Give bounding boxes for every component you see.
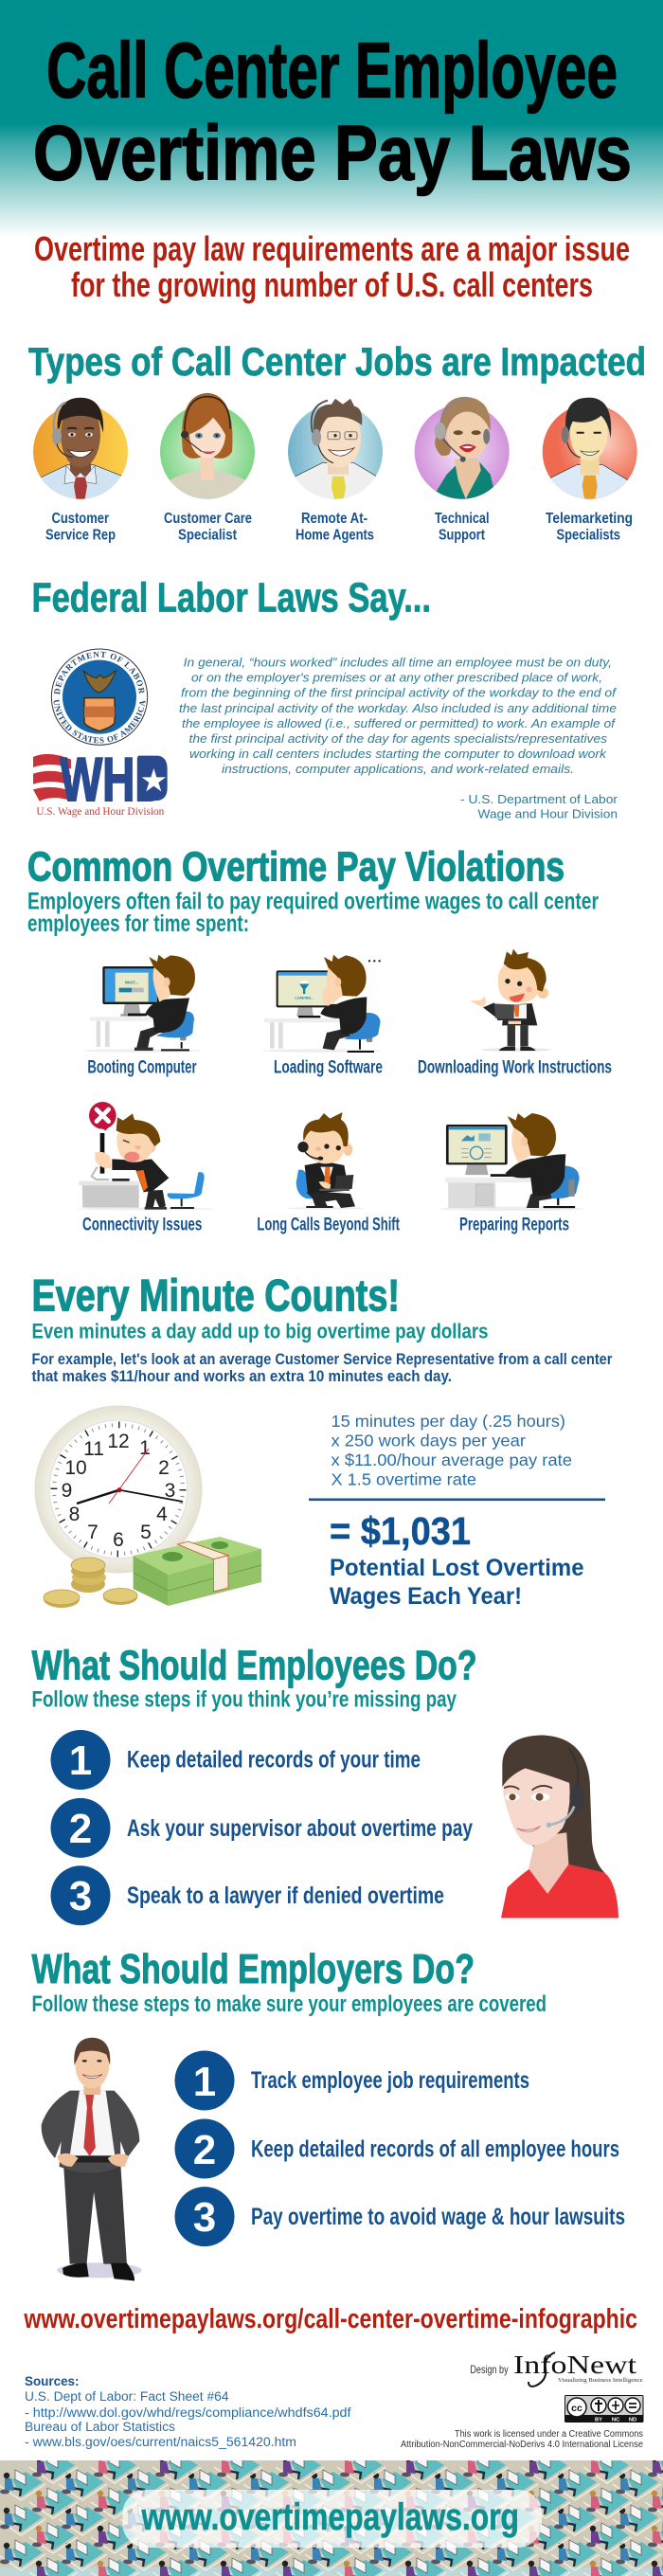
icon: businessman [42,2038,142,2280]
step 3 badge: 3 [193,2194,216,2241]
icon: wall clock: 8 [69,1504,80,1525]
panel: job types [33,393,637,544]
job labels: Home Agents [296,527,374,544]
step 1 badge: 1 [193,2059,216,2105]
icon: department of labor seal: DEPARTMENT OF LABOR [54,652,144,695]
icon: wall clock: 2 [158,1457,170,1479]
job labels: Customer [51,511,109,527]
calculation steps: x 250 work days per year [332,1432,526,1450]
example text: that makes $11/hour and works an extra 10 minutes each day. [32,1368,452,1385]
text block: hours worked quote: the last principal activity of the workday. Also included is any additional time [179,701,617,715]
job labels: Remote At- [301,511,367,527]
step 2 badge [174,2118,235,2179]
calculation steps [332,1412,572,1489]
sources: - http://www.dol.gov/whd/regs/compliance/whdfs64.pdf [25,2405,351,2421]
sources: Sources: [25,2374,80,2389]
heading: every minute counts: Every Minute Counts! [32,1270,400,1320]
calculation result: = $1,031 [330,1509,471,1553]
job labels: Specialist [178,527,238,544]
employees subheading: Follow these steps if you think you’re missing pay [32,1687,457,1713]
violation labels: Connectivity Issues [82,1216,202,1235]
text block: hours worked quote: from the beginning of the first principal activity of the workday to the end of [181,686,617,700]
designer credit logo: Visualizing Business Intelligence [558,2377,643,2384]
violation labels: Preparing Reports [459,1216,569,1235]
calculation steps: 15 minutes per day (.25 hours) [332,1412,565,1431]
job labels [45,511,633,544]
calculation steps: x $11.00/hour average pay rate [332,1450,572,1469]
icon: wage and hour division logo: WHD [60,745,168,814]
designer credit logo: InfoNewt [513,2351,637,2379]
step texts: Keep detailed records of your time [127,1747,421,1774]
step 1 badge [51,1730,110,1790]
creative commons badge: ND [629,2418,636,2423]
example text [32,1351,613,1385]
job labels: Technical [435,511,489,527]
header gradient band [0,0,663,237]
icon: wall clock: 9 [62,1480,72,1502]
creative commons badge [564,2395,644,2423]
violation labels [82,1058,612,1235]
icon: wall clock [35,1406,202,1573]
text block: hours worked quote: or on the employer's premises or at any other prescribed place of work, [191,671,602,685]
sources: - www.bls.gov/oes/current/naics5_561420.htm [25,2435,296,2450]
icon: department of labor seal: UNITED STATES OF AMERICA [53,699,146,743]
heading: employers: What Should Employers Do? [32,1946,475,1992]
icon: wall clock: 7 [87,1522,99,1543]
step 2 badge: 2 [193,2127,216,2173]
step 3 badge: 3 [69,1873,92,1919]
sources [25,2374,351,2450]
icon: connectivity issues [76,1102,215,1210]
designer credit logo [470,2351,643,2387]
sources: U.S. Dept of Labor: Fact Sheet #64 [25,2389,229,2405]
icon: wall clock: 1 [139,1437,151,1459]
job labels: Customer Care [164,511,252,527]
violation labels: Loading Software [274,1058,383,1078]
icon: loading software: LOADING... [295,996,314,1000]
icon: wall clock: 12 [107,1431,130,1452]
calculation total rule [309,1499,605,1501]
icon: long calls beyond shift [287,1112,363,1210]
icon: downloading work instructions [471,949,551,1052]
heading: employees: What Should Employees Do? [32,1643,477,1689]
calculation result: Potential Lost Overtime [330,1555,584,1581]
license note: This work is licensed under a Creative Commons [455,2429,643,2440]
step 3 badge [174,2187,235,2246]
icon: wall clock: 4 [156,1504,168,1525]
icon: gold coins [44,1558,137,1608]
violation labels: Long Calls Beyond Shift [257,1216,400,1235]
step texts [251,2067,625,2230]
job labels: Telemarketing [546,511,633,527]
violations intro text: employees for time spent: [27,910,249,937]
icon: stack of cash [134,1537,261,1606]
employer steps [174,2050,625,2246]
job labels: Service Rep [45,527,116,544]
calculation result: Wages Each Year! [330,1583,522,1610]
icon: wall clock: 3 [165,1480,175,1502]
icon: technical support avatar [415,397,510,505]
subtitle [34,229,630,304]
license note [401,2429,643,2450]
quote attribution: Wage and Hour Division [477,806,618,820]
text block: hours worked quote: working in call centers includes starting the computer to download work [189,747,607,761]
icon: loading software [262,955,382,1053]
icon: wall clock: 6 [113,1529,124,1551]
text block: hours worked quote [179,656,617,776]
icon: woman with headset [501,1736,618,1918]
calculation result [330,1509,584,1610]
step 3 badge [51,1865,110,1925]
text block: hours worked quote: instructions, computer applications, and work-related emails. [222,762,574,776]
quote attribution [460,792,618,820]
step texts: Speak to a lawyer if denied overtime [127,1882,444,1909]
license note: Attribution-NonCommercial-NoDerivs 4.0 International License [401,2440,643,2450]
job labels: Specialists [557,527,620,544]
sources: Bureau of Labor Statistics [25,2420,175,2435]
violations intro text [27,888,599,937]
text block: hours worked quote: In general, “hours worked” includes all time an employee must be on duty, [184,656,612,670]
icon: customer care specialist avatar [160,392,255,499]
icon: booting computer [82,955,202,1053]
employee steps [51,1730,473,1925]
icon: preparing reports [439,1113,583,1211]
calculation steps: X 1.5 overtime rate [332,1470,476,1489]
violation labels: Booting Computer [87,1058,197,1078]
text block: hours worked quote: the employee is allowed (i.e., suffered or permitted) to work. An example of [182,716,616,730]
step texts [127,1747,473,1909]
icon: remote at-home agent avatar [288,398,383,499]
icon: booting computer: WAIT... [125,980,138,984]
step texts: Ask your supervisor about overtime pay [127,1815,473,1842]
footer url pill: www.overtimepaylaws.org [141,2496,519,2538]
title [33,27,632,196]
creative commons badge: NC [612,2418,620,2423]
icon: telemarketing specialist avatar [542,398,637,499]
designer credit logo: Design by [470,2363,509,2376]
step texts: Track employee job requirements [251,2067,529,2094]
icon: wall clock: 10 [64,1457,87,1479]
icon: department of labor seal [51,648,148,746]
step 1 badge [174,2050,235,2111]
icon: wall clock: 11 [83,1438,104,1460]
step 2 badge: 2 [69,1806,92,1852]
icon: wall clock: 5 [140,1522,152,1543]
creative commons badge: BY [595,2418,602,2423]
step 1 badge: 1 [69,1738,92,1784]
creative commons badge: cc [571,2403,582,2414]
icon: wage and hour division logo [33,745,168,818]
step 2 badge [51,1798,110,1858]
icon: wage and hour division logo: U.S. Wage and Hour Division [36,806,165,818]
footer url pill [123,2490,542,2548]
text block: hours worked quote: the first principal activity of the day for agents specialists/representatives [189,731,607,746]
job labels: Support [439,527,486,544]
icon: customer service rep avatar [33,398,128,499]
every minute subheading: Even minutes a day add up to big overtime pay dollars [32,1320,489,1343]
heading: federal labor laws: Federal Labor Laws Say... [32,574,431,621]
quote attribution: - U.S. Department of Labor [460,792,618,806]
footer cubicle pattern band [0,2453,663,2576]
